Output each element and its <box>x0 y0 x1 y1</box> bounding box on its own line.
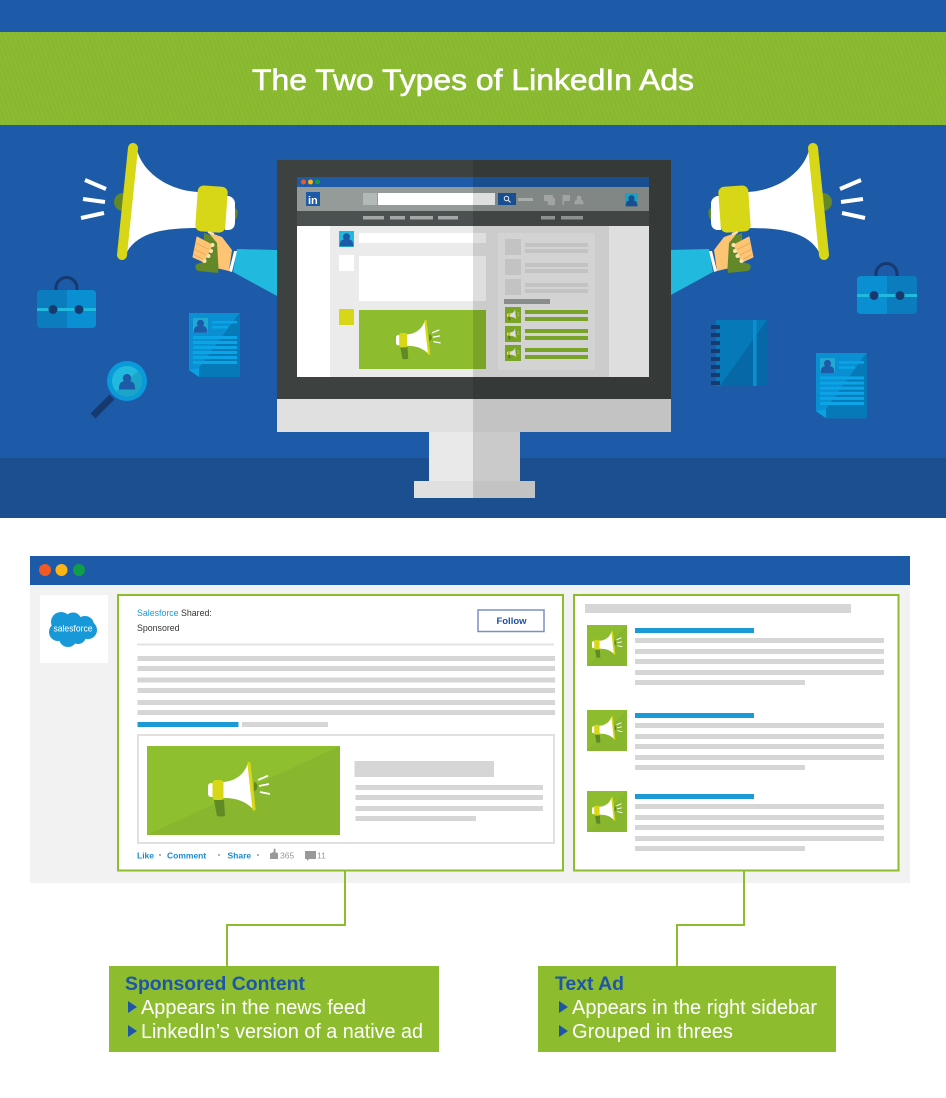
icon: magnifier with person <box>93 361 147 416</box>
search button <box>498 193 516 205</box>
screen: LinkedIn page <box>297 160 671 498</box>
post header: Salesforce Shared: <box>137 608 212 618</box>
post actions: Share <box>228 850 251 860</box>
LinkedIn toolbar <box>297 187 649 211</box>
post actions: Like <box>137 850 154 860</box>
follow button: Follow <box>496 616 527 627</box>
post text placeholder lines <box>138 656 555 727</box>
sidebar column <box>498 233 595 370</box>
title: The Two Types of LinkedIn Ads <box>252 64 694 97</box>
title banner <box>0 32 946 125</box>
text ad 1 <box>587 625 884 685</box>
ad image <box>147 746 340 835</box>
callout: text ad: Grouped in threes <box>572 1021 733 1043</box>
post actions <box>137 848 326 861</box>
left megaphone with hand <box>81 148 277 296</box>
browser mockup <box>30 556 910 883</box>
LinkedIn logo <box>306 192 320 207</box>
icon: right resume document <box>816 353 867 418</box>
callout: text ad: Appears in the right sidebar <box>572 997 817 1019</box>
Salesforce logo card <box>40 595 108 663</box>
LinkedIn logo: in <box>308 195 318 207</box>
icon: notebook <box>711 320 767 386</box>
connector: text ad <box>677 871 744 966</box>
monitor shadow half <box>473 160 671 498</box>
text ad 3 <box>587 791 884 851</box>
browser title bar <box>297 177 649 187</box>
sponsored ad in feed <box>359 310 486 369</box>
monitor stand <box>414 432 535 498</box>
hero background <box>0 0 946 518</box>
post actions: 365 <box>280 850 294 860</box>
LinkedIn nav <box>297 211 649 226</box>
sidebar text ads <box>505 307 588 361</box>
right megaphone with hand <box>669 148 865 296</box>
follow button <box>478 610 544 632</box>
callout: sponsored content: Sponsored Content <box>125 973 305 995</box>
post actions: 11 <box>317 850 326 860</box>
callout: text ad <box>538 966 836 1052</box>
callout: sponsored content: Appears in the news feed <box>141 997 366 1019</box>
panel: text ads <box>574 595 898 870</box>
sponsored label: Sponsored <box>137 623 180 633</box>
Salesforce logo card: salesforce <box>54 624 92 634</box>
post actions: Comment <box>167 850 206 860</box>
icon: left briefcase <box>37 278 96 328</box>
post avatar <box>339 231 354 247</box>
embedded ad card <box>138 735 554 843</box>
monitor chin <box>277 399 671 432</box>
feed column <box>330 226 609 377</box>
callout: sponsored content <box>109 966 439 1052</box>
connector: sponsored content <box>227 871 345 966</box>
icon: left resume document <box>189 313 240 377</box>
monitor <box>30 160 910 1052</box>
panel: sponsored content <box>118 595 563 870</box>
callout: text ad: Text Ad <box>555 973 624 995</box>
toolbar icons <box>544 195 584 206</box>
profile avatar <box>625 193 638 206</box>
callout: sponsored content: LinkedIn’s version of a native ad <box>141 1021 423 1043</box>
monitor bezel <box>277 160 671 399</box>
text ad 2 <box>587 710 884 770</box>
browser title bar <box>30 556 910 585</box>
icon: right briefcase <box>857 264 917 314</box>
